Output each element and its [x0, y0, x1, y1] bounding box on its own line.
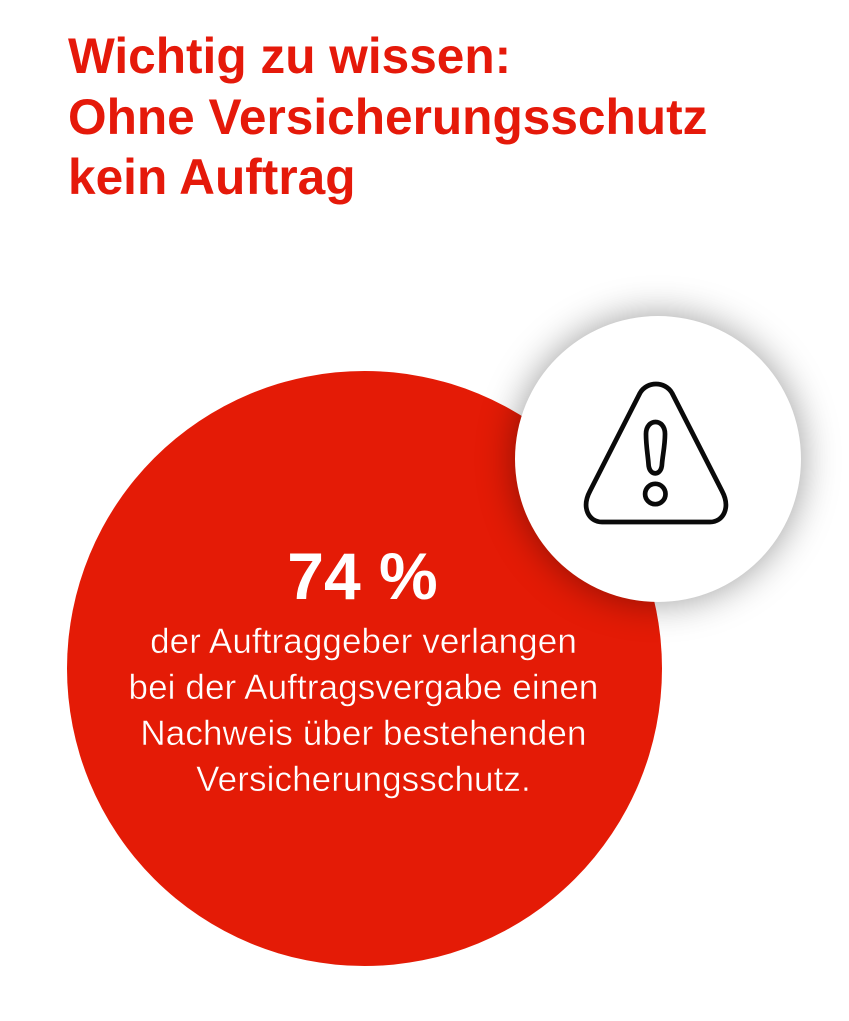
title: Wichtig zu wissen:: [68, 28, 511, 84]
description text: [129, 622, 598, 799]
description text: der Auftraggeber verlangen: [150, 622, 577, 661]
title: [68, 28, 707, 205]
description text: Versicherungsschutz.: [196, 760, 531, 799]
icon: warning badge: [515, 316, 801, 602]
title: Ohne Versicherungsschutz: [68, 89, 707, 145]
description text: bei der Auftragsvergabe einen: [129, 668, 598, 707]
icon: warning triangle: [584, 382, 728, 524]
statistic: 74 %: 74 %: [287, 539, 438, 613]
title: kein Auftrag: [68, 149, 356, 205]
description text: Nachweis über bestehenden: [140, 714, 587, 753]
red circle panel: [67, 371, 662, 966]
